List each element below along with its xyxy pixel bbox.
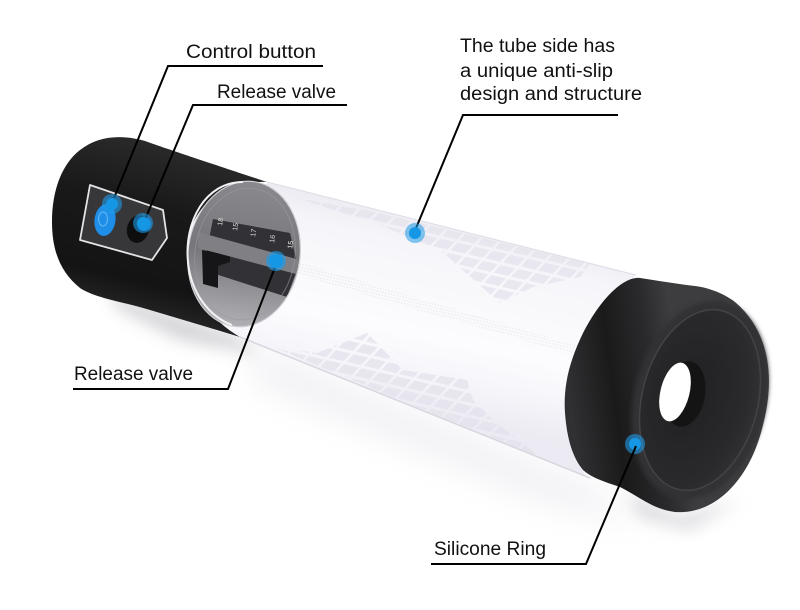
gauge scale band (198, 232, 300, 274)
marker (102, 194, 122, 214)
callout: release valve lower: Release valve (74, 364, 193, 385)
callout: release valve top (133, 82, 347, 233)
callout: tube side text: The tube side has (460, 36, 615, 57)
callout: tube side text: a unique anti-slip (460, 61, 613, 82)
marker (625, 434, 645, 454)
control button (92, 203, 118, 237)
printed scale on tube (298, 262, 575, 355)
marker (266, 251, 286, 271)
callout: control button: Control button (186, 42, 316, 63)
black end cap (52, 137, 267, 337)
callout: release valve lower (73, 251, 286, 389)
clear lens end with gauge (186, 180, 301, 328)
control panel plate (80, 185, 167, 260)
callout: silicone ring (431, 434, 645, 564)
ring shoulder highlight (612, 286, 788, 514)
callout: tube side text (405, 36, 642, 243)
marker (405, 223, 425, 243)
gauge dark strip (203, 219, 298, 297)
callout: tube side text: design and structure (460, 84, 642, 105)
gauge numbers: 15 (287, 240, 295, 249)
callout: control button (102, 42, 323, 214)
ring hole (654, 358, 710, 430)
gauge numbers: 18 (217, 217, 225, 226)
silicone ring (565, 278, 788, 514)
release valve hole (124, 213, 152, 245)
marker (133, 213, 153, 233)
ring face (621, 297, 779, 503)
ground shadow (105, 290, 740, 530)
anti-slip lattice, upper (297, 198, 590, 303)
gauge numbers: 16 (269, 234, 277, 243)
infographic: product diagram (52, 38, 772, 565)
transparent tube body (215, 182, 636, 478)
gauge numbers: 15 (232, 222, 240, 231)
gauge numbers: 17 (250, 228, 258, 237)
callout: silicone ring: Silicone Ring (434, 539, 546, 560)
gauge numbers (217, 217, 295, 249)
anti-slip lattice, lower (273, 333, 540, 457)
callout: release valve top: Release valve (217, 82, 336, 103)
product: pump tube (52, 137, 788, 514)
